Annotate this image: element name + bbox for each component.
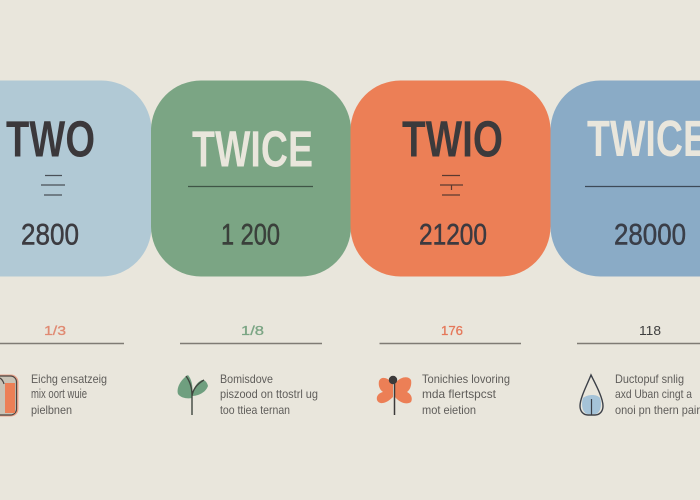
column: lower two: [178, 323, 322, 417]
rule: [188, 186, 313, 188]
value: 28000: 28000: [614, 218, 686, 252]
heading: TWO: TWO: [6, 110, 95, 168]
text block: Bomisdove: [220, 372, 273, 386]
panel: card four, TWICE: [550, 80, 700, 276]
text block: piszood on ttostrl ug: [220, 387, 318, 401]
panel: card one, TWO: [0, 80, 152, 276]
value: 21200: 21200: [419, 218, 487, 252]
text block: mix oort wuie: [31, 386, 87, 401]
value: 2800: 2800: [21, 218, 79, 252]
text block: mot eietion: [422, 403, 476, 417]
icon: stacked dashes: [41, 176, 65, 195]
text block: Eichg ensatzeig: [31, 372, 107, 386]
column: lower three: [377, 323, 521, 417]
text block: [422, 372, 510, 417]
icon: drop: [580, 375, 603, 415]
label: 118: 118: [639, 323, 661, 338]
label: 1/3: 1/3: [44, 323, 66, 338]
column: lower one: [0, 323, 124, 417]
heading: TWIO: TWIO: [402, 110, 503, 168]
icon: battery: [0, 376, 17, 415]
text block: [615, 372, 700, 417]
value: 1 200: 1 200: [221, 218, 280, 252]
heading: TWICE: TWICE: [192, 120, 313, 178]
label: 1/8: 1/8: [241, 323, 264, 338]
icon: butterfly: [377, 376, 412, 415]
text block: [31, 372, 107, 417]
text block: Ductopuf snlig: [615, 372, 684, 386]
text block: pielbnen: [31, 403, 72, 417]
text block: [220, 372, 318, 417]
text block: Tonichies lovoring: [422, 372, 510, 386]
panel: card two, TWICE: [151, 80, 351, 276]
text block: mda flertspcst: [422, 387, 497, 401]
icon: dashes with tick: [440, 176, 463, 195]
label: 1/6: 176: [441, 323, 463, 338]
rule: [585, 186, 700, 188]
icon: sprout: [178, 375, 208, 415]
panel: card three, TWIO: [350, 80, 550, 276]
column: lower four: [577, 323, 700, 417]
text block: too ttiea ternan: [220, 403, 290, 417]
